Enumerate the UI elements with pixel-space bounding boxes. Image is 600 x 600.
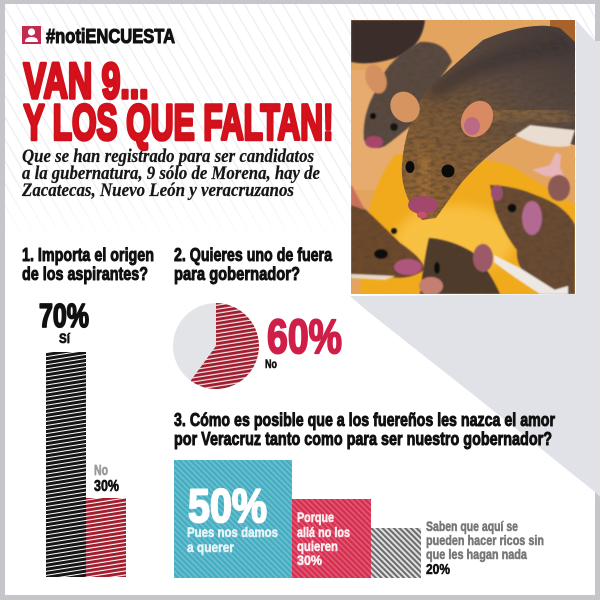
title xyxy=(24,53,334,150)
pie slice 60% xyxy=(191,303,259,389)
label: 20% reason: 20% xyxy=(426,562,450,578)
bar chart: origin of candidates xyxy=(39,297,126,577)
subtitle: Zacatecas, Nuevo León y veracruzanos xyxy=(21,180,294,201)
block: 30%: 30% xyxy=(297,553,322,568)
block: 20% xyxy=(371,528,421,578)
question 1 heading: 1. Importa el origen xyxy=(22,244,154,265)
label: 20% reason: que les hagan nada xyxy=(426,546,527,562)
brand tag xyxy=(22,26,175,48)
mouse: large centre xyxy=(384,26,575,220)
subtitle xyxy=(21,146,320,201)
block: 50%: 50% xyxy=(188,479,267,532)
question 1 heading xyxy=(22,244,154,284)
mouse: lower left xyxy=(351,184,424,280)
grey diagonal shadow panel xyxy=(350,20,600,497)
subtitle: Que se han registrado para ser candidatos xyxy=(22,146,314,167)
hashtag: #notiENCUESTA xyxy=(46,26,175,48)
label: No: No xyxy=(265,357,277,371)
block: 50%: Pues nos damos xyxy=(187,524,278,540)
pie remainder xyxy=(173,303,259,389)
cheese xyxy=(360,150,575,294)
mouse: back dark xyxy=(351,20,425,63)
block: 30%: Porque xyxy=(297,510,334,525)
title: VAN 9... xyxy=(24,53,148,109)
subtitle: a la gubernatura, 9 sólo de Morena, hay de xyxy=(22,163,320,184)
label: 70%: 70% xyxy=(39,297,89,334)
striped background xyxy=(5,4,595,210)
label: No: No xyxy=(94,462,108,479)
label: 30%: 30% xyxy=(94,478,119,495)
mouse: bottom xyxy=(419,238,500,295)
label: 20% reason xyxy=(426,518,544,578)
question 2 heading xyxy=(174,244,333,284)
question 1 heading: de los aspirantes? xyxy=(22,263,148,284)
dorsal shading xyxy=(420,45,570,205)
label: 20% reason: Saben que aquí se xyxy=(426,518,518,534)
question 2 heading: para gobernador? xyxy=(174,263,300,284)
label: Sí: Sí xyxy=(59,330,71,346)
bar: Sí 70% xyxy=(46,352,86,577)
block: 30% xyxy=(292,499,371,578)
label: 20% reason: pueden hacer ricos sin xyxy=(426,532,544,548)
block: 30%: allá no los xyxy=(297,525,350,540)
step chart: reasons xyxy=(174,460,544,578)
label: 60%: 60% xyxy=(267,311,342,364)
bar: No 30% xyxy=(86,498,126,577)
block: 50% xyxy=(174,460,292,578)
mouse: right xyxy=(490,175,575,294)
block: 50%: a querer xyxy=(187,539,234,555)
mouse: upper left xyxy=(361,42,452,148)
pie chart: outsider for governor xyxy=(173,303,342,389)
icon: person badge xyxy=(22,26,41,44)
title: Y LOS QUE FALTAN! xyxy=(24,94,334,150)
question 3 heading xyxy=(174,409,555,449)
block: 30%: quieren xyxy=(297,539,338,554)
question 2 heading: 2. Quieres uno de fuera xyxy=(174,244,333,265)
photo: mice around cheese xyxy=(351,20,575,295)
